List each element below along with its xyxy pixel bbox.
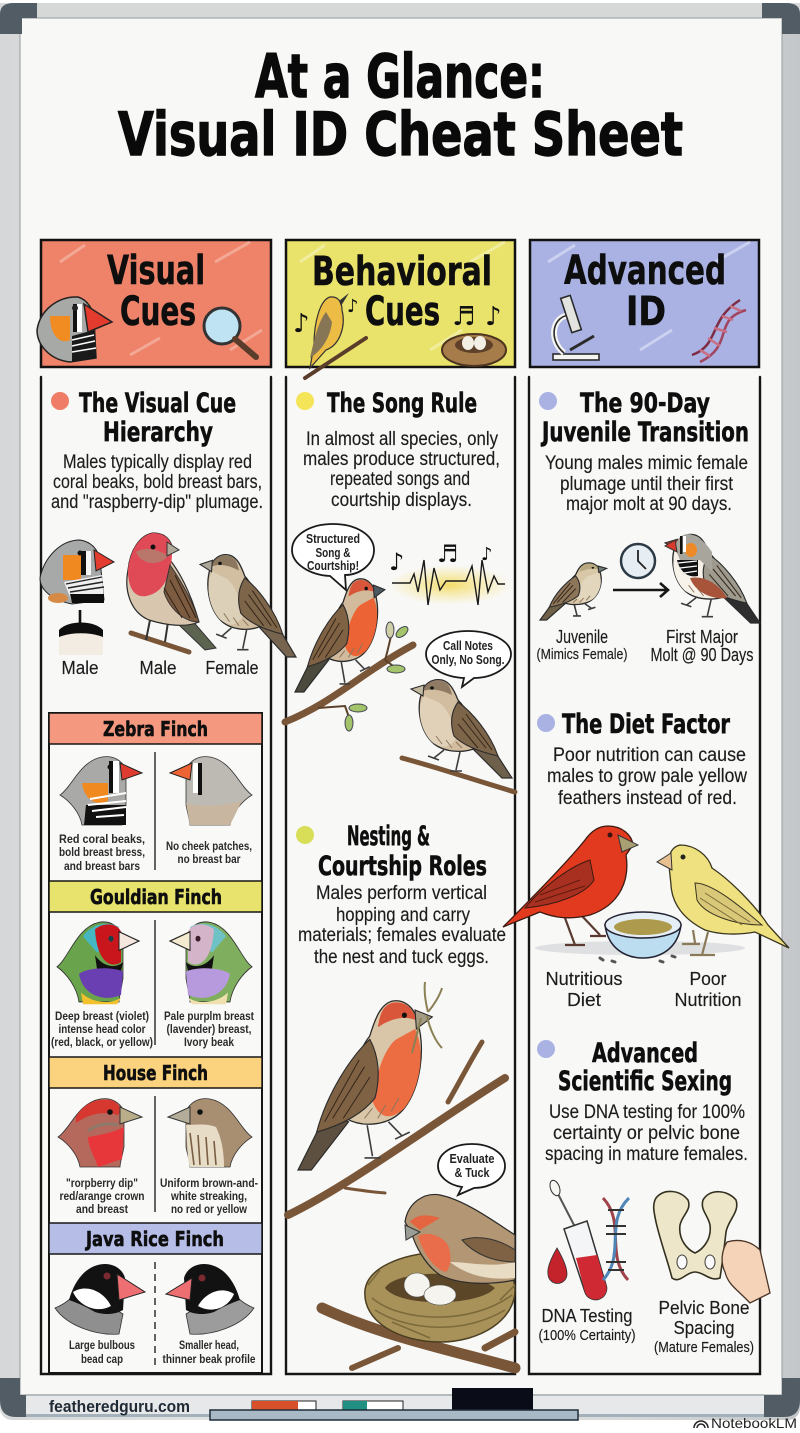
bullet	[537, 714, 555, 732]
callout: call notes	[426, 631, 511, 687]
labels: Female	[206, 658, 258, 678]
panel: behavioral cues header	[286, 240, 515, 378]
body text: Use DNA testing for 100%	[549, 1102, 745, 1123]
captions	[60, 1176, 258, 1216]
icon: music notes and waveform: ♪	[389, 548, 404, 576]
heading: The Visual Cue	[79, 388, 236, 419]
bullet	[296, 392, 314, 410]
labels: Diet	[567, 990, 601, 1010]
branch: singing male	[285, 622, 413, 731]
body text: coral beaks, bold breast bars,	[53, 472, 262, 493]
captions: Ivory beak	[184, 1035, 234, 1049]
panel: visual cues header: Visual	[107, 248, 205, 294]
heading: The 90-Day	[580, 388, 710, 419]
illustration: juvenile	[540, 563, 607, 620]
body text	[51, 452, 263, 513]
body text: spacing in mature females.	[545, 1144, 748, 1165]
illustration: red well-fed bird	[503, 826, 638, 945]
callout: evaluate and tuck	[438, 1144, 505, 1195]
panel: the 90-day juvenile transition	[536, 388, 760, 665]
body text: repeated songs and	[330, 469, 470, 490]
captions: red/arange crown	[60, 1189, 144, 1203]
panel: advanced id header: ID	[626, 289, 666, 335]
captions: bold breast bress,	[59, 845, 145, 859]
body text: Males typically display red	[63, 452, 252, 473]
icon: music notes and waveform	[388, 540, 512, 605]
illustration: adult male zebra finch	[665, 534, 760, 623]
body text	[298, 883, 506, 968]
callout: structured song	[292, 524, 374, 590]
captions	[51, 1009, 254, 1049]
body text	[545, 453, 748, 515]
icon: microscope	[553, 295, 599, 360]
branch: courting male	[288, 1042, 505, 1215]
icon: zebra finch head	[37, 297, 112, 362]
header: Zebra Finch	[103, 717, 208, 741]
heading	[79, 388, 236, 448]
callout: call notes: Call Notes	[443, 638, 493, 653]
panel: behavioral cues header: Behavioral	[312, 249, 492, 295]
icon: music notes and waveform: ♬	[437, 540, 459, 568]
callout: structured song: Structured	[306, 531, 360, 546]
body text: plumage until their first	[560, 474, 734, 495]
illustration: zebra finch male	[40, 540, 114, 655]
body text: feathers instead of red.	[558, 788, 737, 809]
labels: Pelvic Bone	[658, 1298, 750, 1318]
panel: visual cues header: Cues	[120, 289, 196, 335]
labels: Molt @ 90 Days	[650, 645, 754, 665]
labels: (Mimics Female)	[536, 646, 628, 663]
illustration: singing male finch	[295, 579, 385, 692]
heading: The Diet Factor	[562, 709, 730, 740]
icon: music notes: ♬	[452, 302, 475, 332]
labels: Poor	[690, 969, 726, 989]
captions: Pale purplm breast	[164, 1009, 254, 1023]
body text	[303, 429, 500, 511]
labels: Nutritious	[546, 969, 622, 989]
body text: the nest and tuck eggs.	[314, 947, 489, 968]
callout: structured song: Song &	[316, 545, 350, 560]
icon: test tube with swab and blood drop	[548, 1179, 607, 1300]
head: male gouldian	[57, 922, 139, 1004]
illustration: house finch female	[200, 555, 296, 657]
labels: Spacing	[674, 1318, 734, 1338]
title	[118, 42, 683, 170]
site credit: featheredguru.com	[49, 1397, 190, 1416]
heading: The Song Rule	[327, 388, 477, 419]
captions: Smaller head,	[179, 1338, 239, 1352]
header	[49, 713, 262, 744]
labels: DNA Testing	[542, 1306, 632, 1326]
body text: Males perform vertical	[316, 883, 487, 904]
captions: Deep breast (violet)	[55, 1009, 149, 1023]
body text: courtship displays.	[331, 490, 472, 511]
panel: visual cue hierarchy	[40, 388, 296, 678]
head: female gouldian	[170, 922, 252, 1004]
labels: (Mature Females)	[654, 1339, 754, 1356]
captions: bead cap	[81, 1352, 123, 1366]
body text: males produce structured,	[303, 449, 500, 470]
icon: dna helix	[692, 300, 746, 362]
heading	[558, 1038, 732, 1097]
body text: major molt at 90 days.	[566, 494, 732, 515]
body text: hopping and carry	[336, 905, 470, 926]
marker tray	[210, 1388, 578, 1420]
icon: music notes: ♪	[347, 296, 358, 317]
illustration: nest with eggs	[365, 1252, 515, 1342]
labels	[546, 969, 742, 1010]
header	[49, 1057, 262, 1088]
icon: nest with eggs	[442, 334, 506, 366]
callout: evaluate and tuck: & Tuck	[454, 1165, 490, 1180]
panel: the song rule	[285, 388, 515, 792]
heading: Advanced	[592, 1038, 698, 1069]
heading	[318, 821, 487, 882]
captions	[69, 1338, 256, 1366]
callout: structured song: Courtship!	[307, 558, 359, 573]
illustration: male carrying nest material	[298, 982, 442, 1170]
body text: Young males mimic female	[545, 453, 748, 474]
captions: No cheek patches,	[166, 839, 252, 853]
bullet	[537, 1040, 555, 1058]
header	[49, 881, 262, 912]
panel: advanced id header	[530, 240, 759, 367]
bullet	[296, 826, 314, 844]
panel: advanced id header: Advanced	[564, 248, 726, 294]
body text: certainty or pelvic bone	[553, 1123, 740, 1144]
labels: Male	[140, 658, 176, 678]
captions: "rorpberry dip"	[66, 1176, 138, 1190]
bullet	[539, 392, 557, 410]
captions: intense head color	[58, 1022, 146, 1036]
head: male house finch	[58, 1099, 142, 1167]
illustration: nest front rim	[368, 1270, 515, 1338]
labels: (100% Certainty)	[538, 1327, 636, 1344]
head: small java sparrow	[166, 1264, 254, 1334]
icon: music notes: ♪	[485, 302, 502, 332]
header: Java Rice Finch	[84, 1227, 224, 1251]
labels	[538, 1298, 754, 1356]
panel: advanced scientific sexing	[537, 1038, 770, 1356]
body text: Poor nutrition can cause	[553, 745, 746, 766]
labels	[536, 627, 754, 665]
icon: magnifying glass	[204, 308, 256, 357]
labels: Male	[62, 658, 98, 678]
captions: no breast bar	[178, 852, 241, 866]
captions: (red, black, or yellow)	[51, 1035, 153, 1049]
captions: no red or yellow	[171, 1202, 248, 1216]
arrow	[613, 583, 668, 597]
callout: evaluate and tuck: Evaluate	[450, 1151, 494, 1166]
head: large java sparrow	[55, 1264, 145, 1334]
captions: thinner beak profile	[162, 1352, 256, 1366]
labels	[62, 658, 258, 678]
illustration: seed bowl	[600, 912, 681, 962]
captions	[59, 832, 252, 873]
panel: behavioral cues header: Cues	[365, 289, 440, 335]
captions: white streaking,	[170, 1189, 247, 1203]
card: house finch	[49, 1057, 262, 1216]
icon: music notes and waveform: ♪	[481, 544, 492, 565]
captions: and breast	[76, 1202, 128, 1216]
labels: Juvenile	[556, 627, 608, 647]
heading: Nesting &	[347, 821, 430, 852]
illustration: house finch male	[127, 533, 216, 652]
card: java rice finch	[49, 1223, 262, 1370]
notebooklm credit: NotebookLM	[711, 1415, 797, 1431]
captions: Red coral beaks,	[59, 832, 145, 846]
head: male zebra	[60, 757, 142, 825]
labels: Nutrition	[674, 990, 742, 1010]
callout: call notes: Only, No Song.	[432, 652, 504, 667]
header: Gouldian Finch	[90, 885, 222, 909]
body text	[545, 1102, 748, 1165]
illustration: shadow under birds	[535, 941, 745, 955]
icon: dna helix	[603, 1198, 629, 1280]
head: female zebra	[170, 757, 252, 825]
header: House Finch	[103, 1061, 208, 1085]
title: At a Glance:	[255, 42, 545, 112]
body text	[547, 745, 747, 809]
header	[49, 1223, 262, 1254]
panel: the diet factor	[503, 709, 789, 1010]
heading: Courtship Roles	[318, 851, 487, 882]
body text: and "raspberry-dip" plumage.	[51, 492, 263, 513]
captions: Uniform brown-and-	[160, 1176, 258, 1190]
icon: singing bird on branch	[305, 293, 366, 378]
illustration: female finch on nest	[405, 1194, 515, 1283]
panel: species comparison table	[49, 713, 262, 1373]
captions: and breast bars	[64, 859, 140, 873]
heading: Hierarchy	[103, 417, 213, 448]
captions: (lavender) breast,	[166, 1022, 252, 1036]
card: zebra finch	[49, 713, 262, 873]
branch: female	[402, 758, 515, 792]
illustration: pale yellow bird	[657, 845, 789, 955]
illustration: quiet female finch	[411, 680, 512, 778]
icon: music notes	[293, 296, 502, 339]
panel: nesting and courtship roles	[288, 821, 515, 1368]
body text: In almost all species, only	[306, 429, 498, 450]
body text: materials; females evaluate	[298, 925, 506, 946]
icon: music notes: ♪	[293, 309, 310, 339]
captions: Large bulbous	[69, 1338, 135, 1352]
panel: visual cues header	[37, 240, 271, 367]
icon: clock	[621, 544, 655, 578]
icon: pelvic bone and hand	[654, 1191, 770, 1303]
illustration: nest branch	[322, 1308, 515, 1368]
labels: First Major	[666, 627, 738, 647]
bullet	[51, 392, 69, 410]
head: female house finch	[168, 1099, 252, 1167]
heading	[541, 388, 749, 448]
panel: column outlines	[41, 377, 760, 1374]
body text: males to grow pale yellow	[547, 766, 747, 787]
card: gouldian finch	[49, 881, 262, 1049]
